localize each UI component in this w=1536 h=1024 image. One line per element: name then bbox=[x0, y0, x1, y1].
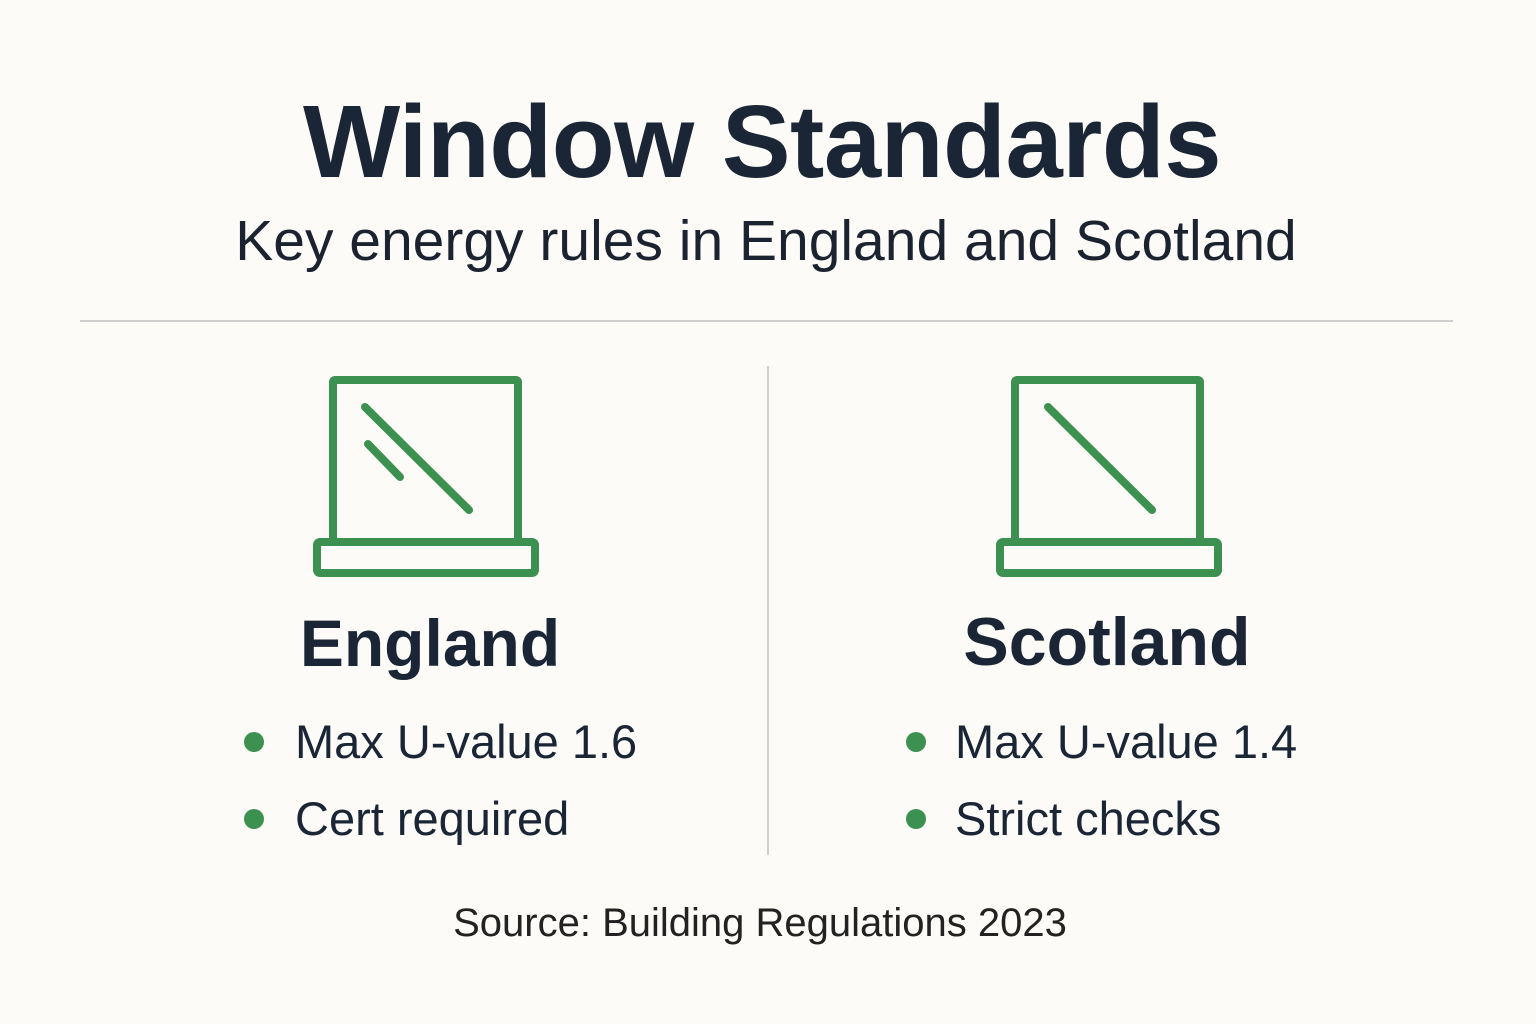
list: England bbox=[244, 715, 637, 845]
list: England: Cert required bbox=[295, 792, 569, 845]
subtitle: Key energy rules in England and Scotland bbox=[235, 209, 1297, 273]
list: Scotland bbox=[906, 715, 1297, 845]
heading: Scotland: Scotland bbox=[963, 604, 1251, 680]
title: Window Standards bbox=[303, 84, 1221, 199]
icon: Scotland window bbox=[996, 376, 1222, 577]
icon: England window bbox=[313, 376, 539, 577]
heading: England: England bbox=[300, 606, 560, 680]
list: Scotland: Max U-value 1.4 bbox=[955, 715, 1297, 768]
list: Scotland: Strict checks bbox=[955, 792, 1221, 845]
source note: Source: Building Regulations 2023 bbox=[453, 901, 1067, 945]
list: England: Max U-value 1.6 bbox=[295, 715, 637, 768]
